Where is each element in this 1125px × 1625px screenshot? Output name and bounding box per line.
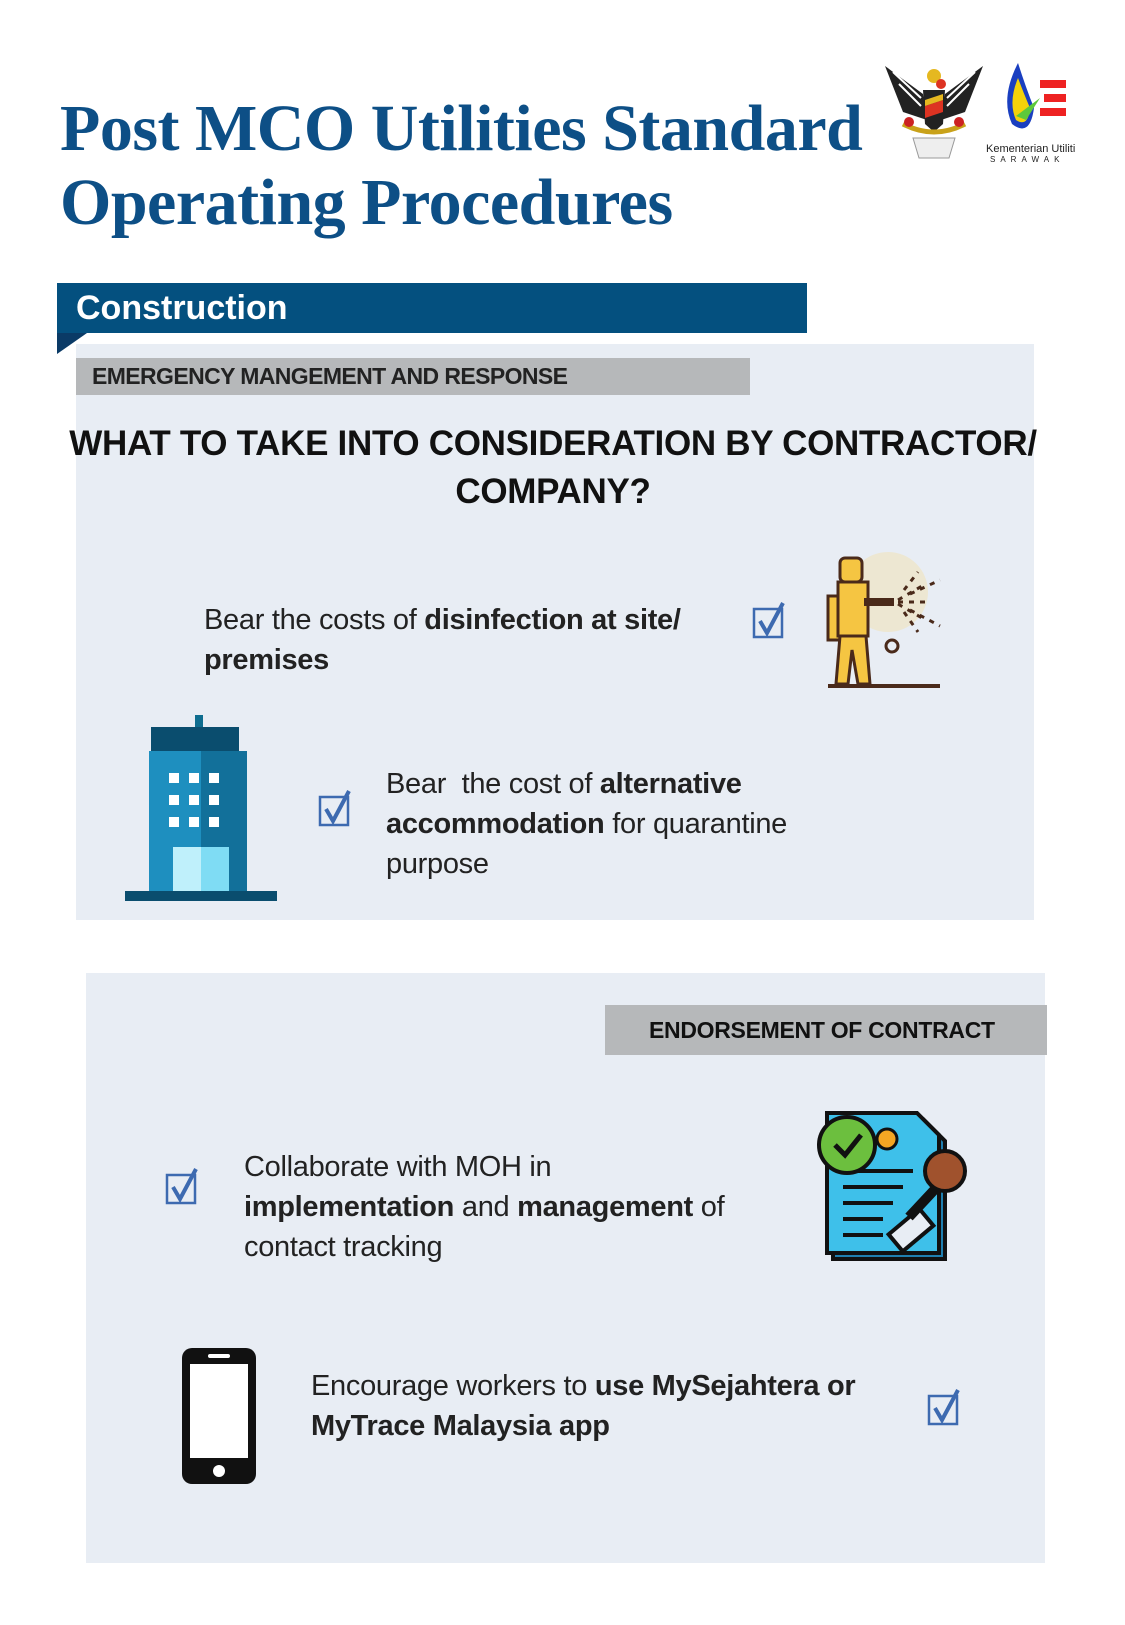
heading: COMPANY? (455, 472, 651, 511)
item: disinfection text: Bear the costs of disinfection at site/ (204, 604, 681, 636)
logo: ministry: SARAWAK (990, 155, 1064, 164)
checkbox 4 (928, 1389, 960, 1426)
title: Operating Procedures (60, 166, 673, 239)
item: MOH text: Collaborate with MOH in (244, 1151, 551, 1183)
item: MySejahtera text: Encourage workers to use MySejahtera or (311, 1370, 855, 1402)
checkbox 2 (318, 790, 351, 826)
panel: emergency management (76, 344, 1034, 920)
item: MOH text: implementation and management of (244, 1191, 724, 1223)
checkbox 1 (752, 602, 785, 638)
item: accommodation text: accommodation for quarantine (386, 808, 787, 840)
item: disinfection text: premises (204, 644, 329, 676)
subheading bar: endorsement: ENDORSEMENT OF CONTRACT (649, 1017, 995, 1043)
item: MOH text (244, 1151, 725, 1263)
section banner: construction (57, 283, 807, 333)
icon: document with stamp (817, 1111, 967, 1261)
icon: building (125, 715, 277, 901)
banner tail (57, 333, 87, 354)
logo: ministry: Kementerian Utiliti (986, 143, 1075, 155)
subheading bar: endorsement (605, 1005, 1047, 1055)
icon: smartphone (182, 1348, 256, 1484)
logo: ministry (986, 63, 1075, 164)
subheading bar: emergency (76, 358, 750, 395)
item: accommodation text: purpose (386, 848, 489, 880)
item: MOH text: contact tracking (244, 1231, 442, 1263)
subheading bar: emergency: EMERGENCY MANGEMENT AND RESPONSE (92, 363, 567, 389)
heading (69, 424, 1037, 511)
checkbox 3 (166, 1168, 198, 1204)
item: MySejahtera text (311, 1370, 856, 1442)
panel: endorsement (86, 973, 1045, 1563)
section banner: construction: Construction (76, 289, 288, 327)
item: disinfection text (204, 604, 681, 676)
logo: state crest (885, 66, 983, 158)
heading: WHAT TO TAKE INTO CONSIDERATION BY CONTRACTOR/ (69, 424, 1037, 463)
title: Post MCO Utilities Standard (60, 92, 862, 165)
item: MySejahtera text: MyTrace Malaysia app (311, 1410, 610, 1442)
item: accommodation text (386, 768, 787, 880)
title (60, 92, 862, 239)
icon: disinfection sprayer (826, 552, 941, 688)
item: accommodation text: Bear the cost of alternative (386, 768, 742, 800)
